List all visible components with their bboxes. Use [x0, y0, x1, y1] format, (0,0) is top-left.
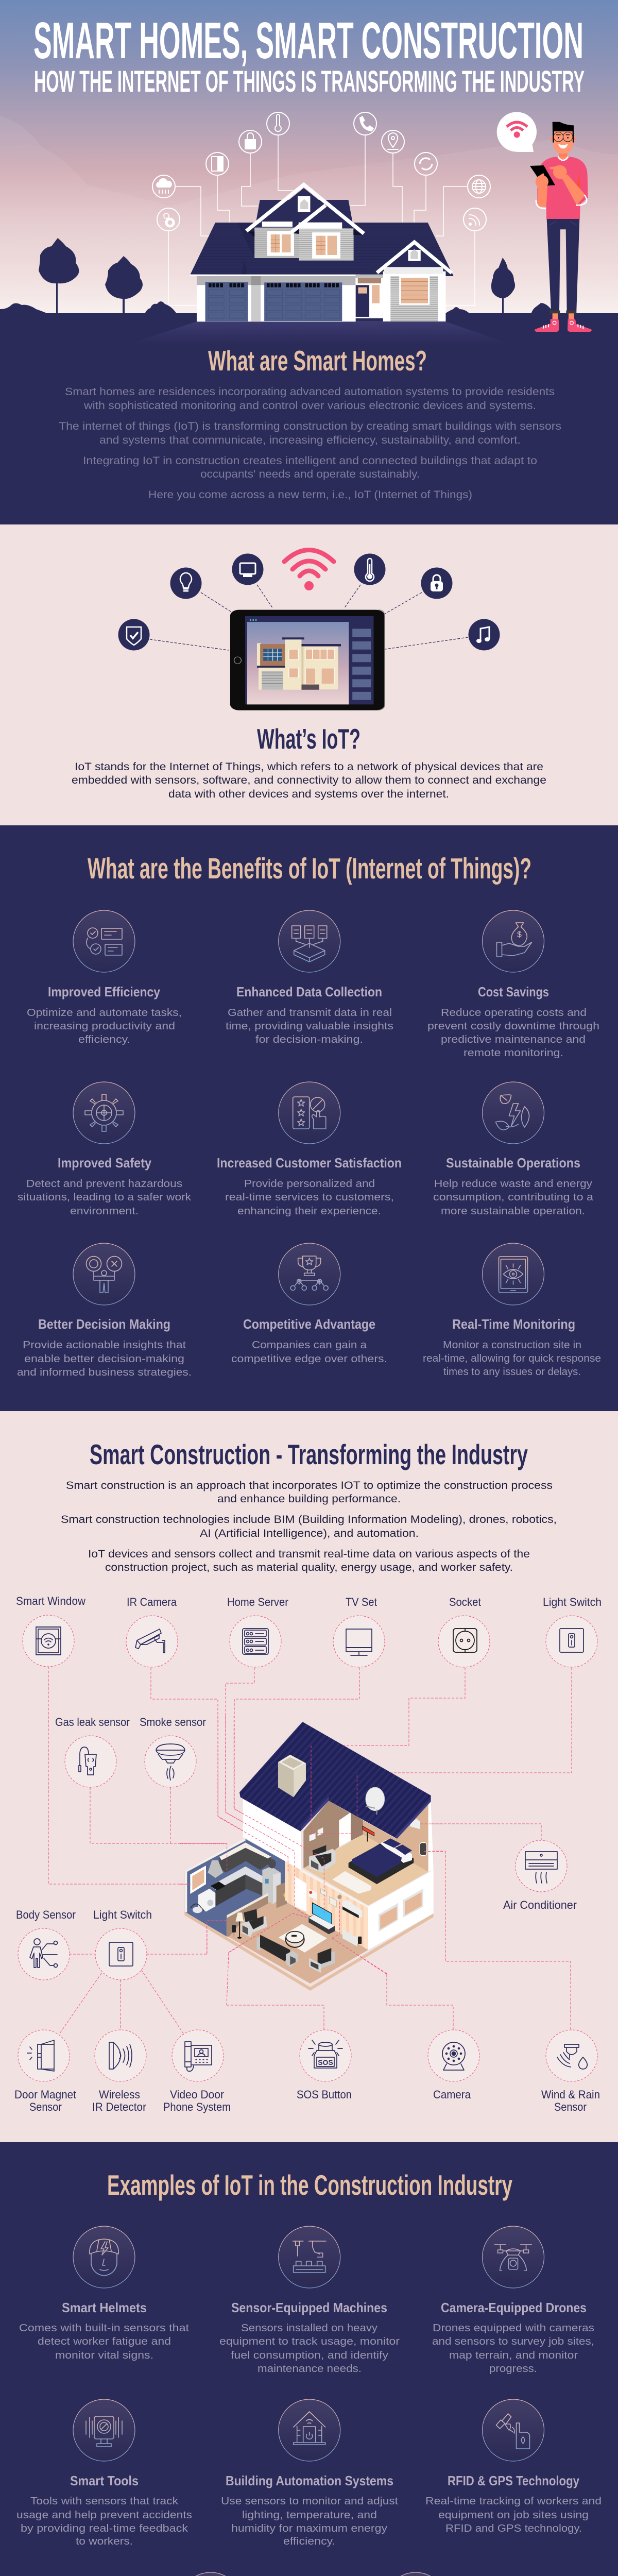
heading: what are smart homes: What are Smart Homes? — [208, 345, 427, 377]
sensor: smoke — [140, 1716, 206, 1787]
card: smart tools: to workers. — [76, 2536, 133, 2547]
sensor: wind and rain — [541, 2030, 600, 2113]
card: sensor equipped machines: equipment to track usage, monitor — [219, 2336, 400, 2347]
sensor: light switch left — [93, 1908, 152, 1980]
panel: what's IoT — [0, 524, 618, 825]
bedroom — [303, 1835, 428, 1906]
icon: factory machine — [279, 2226, 340, 2288]
card: smart tools: usage and help prevent accidents — [16, 2510, 192, 2521]
illustration: isometric smart house — [180, 1716, 443, 1991]
card: improved safety: Improved Safety — [58, 1155, 151, 1171]
card: building automation: lighting, temperature, and — [242, 2510, 377, 2521]
card: smart helmets: detect worker fatigue and — [38, 2336, 171, 2347]
intro paragraphs: Integrating IoT in construction creates intelligent and connected buildings that adapt to — [83, 455, 537, 467]
icon: globe — [468, 175, 490, 198]
outer white wall — [368, 1870, 434, 1950]
sensor: light switch top: Light Switch — [543, 1596, 602, 1608]
card: enhanced data collection: Gather and transmit data in real — [228, 1007, 392, 1019]
sensor: gas leak: Gas leak sensor — [55, 1716, 130, 1728]
card: improved efficiency: increasing productivity and — [34, 1021, 175, 1032]
sensor: IR camera: IR Camera — [127, 1596, 177, 1608]
card: smart tools: Tools with sensors that track — [30, 2496, 179, 2507]
definition text: IoT stands for the Internet of Things, which refers to a network of physical devices that are — [75, 761, 543, 773]
icon: padlock — [239, 130, 262, 153]
icon: signal — [464, 208, 486, 231]
sensor: body sensor: Body Sensor — [16, 1908, 76, 1921]
kitchen furniture — [219, 1842, 271, 1873]
card: better decision making: Provide actionable insights that — [23, 1340, 186, 1351]
stripe wall — [285, 1861, 368, 1950]
tree right — [491, 258, 515, 314]
card: smart tools: Smart Tools — [70, 2473, 139, 2488]
card: smart helmets: Smart Helmets — [62, 2300, 147, 2315]
intro paragraphs: Smart homes are residences incorporating advanced automation systems to provide residents — [65, 386, 555, 398]
sensor: light switch left: Light Switch — [93, 1908, 152, 1921]
satellite dish — [366, 1787, 385, 1811]
card: customer satisfaction: Increased Customer Satisfaction — [217, 1155, 402, 1171]
sensor: smart window: Smart Window — [16, 1595, 85, 1607]
card: camera drones — [432, 2226, 594, 2375]
panel: benefits of IoT — [0, 825, 618, 1411]
card: sensor equipped machines: Sensors installed on heavy — [241, 2323, 377, 2334]
illustration: tablet with smart house — [230, 610, 385, 710]
card: sensor equipped machines: maintenance needs. — [258, 2363, 362, 2375]
sensor: door magnet: Sensor — [29, 2100, 62, 2113]
sensor: wireless IR detector: Wireless — [99, 2088, 140, 2101]
card: smart helmets: monitor vital signs. — [55, 2350, 153, 2361]
card: sustainable operations: consumption, contributing to a — [433, 1192, 594, 1203]
soft clouds — [0, 116, 618, 314]
sensor: wind and rain: Sensor — [554, 2100, 587, 2113]
definition text — [72, 761, 546, 800]
card: smart building materials — [333, 2572, 499, 2576]
small house — [257, 637, 341, 690]
card: RFID GPS — [425, 2399, 602, 2534]
card: building automation: Use sensors to monitor and adjust — [221, 2496, 398, 2507]
card: camera drones: Drones equipped with cameras — [433, 2323, 594, 2334]
card: cost savings: predictive maintenance and — [441, 1034, 586, 1045]
card: cost savings: Cost Savings — [478, 984, 549, 999]
card: enhanced data collection: time, providing valuable insights — [226, 1021, 393, 1032]
icon: monitor — [232, 553, 264, 585]
sensor: IR camera — [126, 1596, 178, 1667]
card: real-time monitoring: Monitor a construction site in — [443, 1340, 581, 1351]
card: better decision making: Better Decision Making — [38, 1316, 170, 1332]
icon: smart house — [279, 2399, 340, 2461]
icon: drone — [482, 2226, 544, 2288]
card: improved safety: environment. — [70, 1206, 139, 1217]
construction paragraphs: and enhance building performance. — [217, 1493, 401, 1505]
card: better decision making — [17, 1243, 192, 1378]
card: better decision making: and informed business strategies. — [17, 1367, 192, 1378]
ground — [0, 313, 618, 524]
card: sustainable operations: more sustainable operation. — [441, 1206, 585, 1217]
card: customer satisfaction: enhancing their experience. — [237, 1206, 381, 1217]
card: cost savings: prevent costly downtime through — [427, 1021, 599, 1032]
icon: sync arrows — [415, 152, 437, 175]
sensor: body sensor — [16, 1908, 76, 1980]
sensor: SOS button: SOS Button — [297, 2088, 352, 2101]
card: competitive advantage: Companies can gain a — [252, 1340, 367, 1351]
sensor: video door phone: Video Door — [170, 2088, 224, 2101]
card: cost savings — [427, 910, 599, 1059]
card: building automation — [221, 2399, 398, 2547]
icon: shield check — [118, 619, 149, 650]
icon: safety wheel — [73, 1082, 135, 1144]
definition text: embedded with sensors, software, and connectivity to allow them to connect and exchange — [72, 774, 546, 786]
card: customer satisfaction — [217, 1082, 402, 1217]
icon: smart watch — [180, 2572, 242, 2576]
chimney — [278, 1762, 294, 1797]
card: building automation: efficiency. — [283, 2536, 335, 2547]
sensor: home server — [227, 1596, 288, 1667]
card: enhanced data collection: for decision-making. — [255, 1034, 363, 1045]
card: sensor equipped machines: fuel consumption, and identify — [231, 2350, 388, 2361]
card: enhanced data collection: Enhanced Data Collection — [236, 984, 382, 999]
card: better decision making: enable better decision-making — [24, 1353, 184, 1365]
icon: trophy — [279, 1243, 340, 1305]
sensor: smoke: Smoke sensor — [140, 1716, 206, 1728]
armchair upstairs — [313, 1845, 326, 1863]
sensor: gas leak — [55, 1716, 130, 1787]
card: sustainable operations: Sustainable Operations — [446, 1155, 580, 1171]
card: camera drones: Camera-Equipped Drones — [441, 2300, 587, 2315]
construction paragraphs — [61, 1480, 557, 1573]
card: competitive advantage: competitive edge over others. — [231, 1353, 387, 1365]
icon: music note — [469, 619, 500, 650]
icon: phone — [354, 112, 376, 135]
card: camera drones: and sensors to survey job sites, — [432, 2336, 594, 2347]
card: improved safety — [18, 1082, 192, 1217]
sensor: air conditioner — [503, 1840, 577, 1911]
icon: buildings — [385, 2572, 447, 2576]
intro paragraphs — [59, 386, 561, 501]
card: smart helmets — [19, 2226, 190, 2361]
card: customer satisfaction: Provide personalized and — [244, 1178, 375, 1190]
icon: padlock — [421, 568, 452, 599]
sensor: door magnet — [14, 2030, 76, 2113]
upper white wall — [243, 1799, 301, 1870]
icon: checklists — [73, 910, 135, 972]
dashed connector lines — [48, 1667, 572, 2034]
intro paragraphs: with sophisticated monitoring and control over various electronic devices and systems. — [83, 400, 536, 412]
dashed connector lines — [150, 585, 468, 650]
icon: wifi signal — [284, 550, 334, 590]
icon: map pin — [382, 130, 404, 153]
intro paragraphs: Here you come across a new term, i.e., IoT (Internet of Things) — [148, 489, 472, 501]
icon: hand with money bag — [482, 910, 544, 972]
card: smart tools — [16, 2399, 192, 2547]
tree middle — [105, 256, 143, 314]
sensor: light switch top — [543, 1596, 602, 1667]
sensor: video door phone: Phone System — [163, 2100, 231, 2113]
sensor: SOS button: SOS — [318, 2058, 333, 2066]
construction paragraphs: IoT devices and sensors collect and transmit real-time data on various aspects of the — [88, 1548, 530, 1560]
card: customer satisfaction: real-time services to customers, — [225, 1192, 394, 1203]
driveway — [129, 321, 510, 344]
icon: satellite and GPS — [482, 2399, 544, 2461]
bed — [349, 1843, 414, 1884]
construction paragraphs: Smart construction technologies include BIM (Building Information Modeling), drones, robotics, — [61, 1514, 557, 1526]
card: real-time monitoring: real-time, allowing for quick response — [423, 1353, 601, 1364]
card: smart tools: by providing real-time feedback — [21, 2523, 188, 2534]
icon: light bulb — [170, 568, 202, 599]
icon: gears — [157, 208, 180, 231]
tree left — [39, 238, 79, 314]
sensor: door magnet: Door Magnet — [14, 2088, 76, 2101]
panel: header hero — [0, 0, 618, 524]
card: RFID GPS: Real-time tracking of workers and — [425, 2496, 602, 2507]
card: improved efficiency: Improved Efficiency — [48, 984, 160, 999]
card: RFID GPS: RFID and GPS technology. — [445, 2523, 582, 2534]
connector lines inside the house — [180, 1716, 443, 1974]
icon: energy leaves — [482, 1082, 544, 1144]
card: RFID GPS: equipment on job sites using — [438, 2510, 589, 2521]
sensor: air conditioner: Air Conditioner — [503, 1899, 577, 1911]
icon: thermometer — [267, 112, 289, 135]
card: cost savings: Reduce operating costs and — [441, 1007, 587, 1019]
illustration: man with tablet — [497, 112, 592, 332]
sensor: camera — [428, 2030, 479, 2101]
sensor: video door phone — [163, 2030, 231, 2113]
icon: shield door — [206, 152, 229, 175]
card: real-time monitoring: Real-Time Monitoring — [452, 1316, 575, 1332]
icon: hand with money bag: $ — [517, 930, 522, 939]
sensor: wireless IR detector — [92, 2030, 146, 2113]
icon: yes no signs — [73, 1243, 135, 1305]
living room — [279, 1924, 327, 1953]
icon: helmet — [73, 2226, 135, 2288]
sensor: home server: Home Server — [227, 1596, 288, 1608]
intro paragraphs: occupants' needs and operate sustainably. — [200, 468, 420, 480]
sensor: smart window — [16, 1595, 85, 1667]
card: sensor equipped machines: Sensor-Equipped Machines — [231, 2300, 387, 2315]
card: enhanced data collection — [226, 910, 393, 1045]
card: sustainable operations: Help reduce waste and energy — [434, 1178, 592, 1190]
card: competitive advantage: Competitive Advantage — [243, 1316, 375, 1332]
sensor: wind and rain: Wind & Rain — [541, 2088, 600, 2101]
sensor: socket: Socket — [449, 1596, 481, 1608]
card: improved efficiency: Optimize and automate tasks, — [27, 1007, 182, 1019]
card: real-time monitoring — [423, 1243, 601, 1378]
card: improved efficiency: efficiency. — [78, 1034, 130, 1045]
sensor: TV set: TV Set — [346, 1596, 377, 1608]
construction paragraphs: construction project, such as material quality, energy usage, and worker safety. — [105, 1562, 513, 1573]
icon: thermometer — [354, 553, 385, 585]
card: building automation: Building Automation Systems — [226, 2473, 393, 2488]
icon: star rating — [279, 1082, 340, 1144]
panel: examples of IoT — [0, 2142, 618, 2576]
card: wearable technology — [126, 2572, 296, 2576]
card: competitive advantage — [231, 1243, 387, 1365]
intro paragraphs: The internet of things (IoT) is transforming construction by creating smart buildings with sensors — [59, 420, 561, 432]
roof — [239, 1722, 431, 1838]
construction paragraphs: AI (Artificial Intelligence), and automation. — [200, 1528, 419, 1539]
construction paragraphs: Smart construction is an approach that incorporates IOT to optimize the construction process — [66, 1480, 553, 1492]
partition and left armchair — [227, 1893, 268, 1937]
sky background — [0, 0, 618, 314]
card: camera drones: map terrain, and monitor — [449, 2350, 578, 2361]
icon: data box — [279, 910, 340, 972]
bushes — [0, 301, 551, 315]
sensor: wireless IR detector: IR Detector — [92, 2100, 146, 2113]
card: sustainable operations — [433, 1082, 594, 1217]
card: smart helmets: Comes with built-in sensors that — [19, 2323, 190, 2334]
card: cost savings: remote monitoring. — [464, 1047, 563, 1059]
card: RFID GPS: RFID & GPS Technology — [448, 2473, 579, 2488]
icon: rain cloud — [152, 175, 175, 198]
kitchen wall — [184, 1839, 285, 1937]
card: sensor equipped machines — [219, 2226, 400, 2375]
card: real-time monitoring: times to any issues or delays. — [443, 1366, 581, 1378]
card: building automation: humidity for maximum energy — [231, 2523, 387, 2534]
icon: scanner tool — [73, 2399, 135, 2461]
intro paragraphs: and systems that communicate, increasing efficiency, sustainability, and comfort. — [99, 434, 521, 446]
card: improved efficiency — [27, 910, 182, 1045]
sensor: SOS button — [297, 2030, 352, 2101]
panel: smart construction — [0, 1411, 618, 2142]
card: camera drones: progress. — [489, 2363, 537, 2375]
speech bubble with wifi — [497, 112, 537, 152]
slab and floor — [184, 1912, 434, 1991]
sensor: socket — [438, 1596, 490, 1667]
circuit lines from icons to house — [168, 135, 475, 306]
icon: tablet with eye — [482, 1243, 544, 1305]
card: improved safety: situations, leading to a safer work — [18, 1192, 192, 1203]
card: improved safety: Detect and prevent hazardous — [26, 1178, 182, 1190]
sensor: camera: Camera — [433, 2088, 471, 2101]
definition text: data with other devices and systems over the internet. — [168, 788, 449, 800]
illustration: suburban house — [190, 184, 454, 321]
heading: what's IoT: What’s IoT? — [257, 723, 360, 755]
sensor: TV set — [333, 1596, 385, 1667]
